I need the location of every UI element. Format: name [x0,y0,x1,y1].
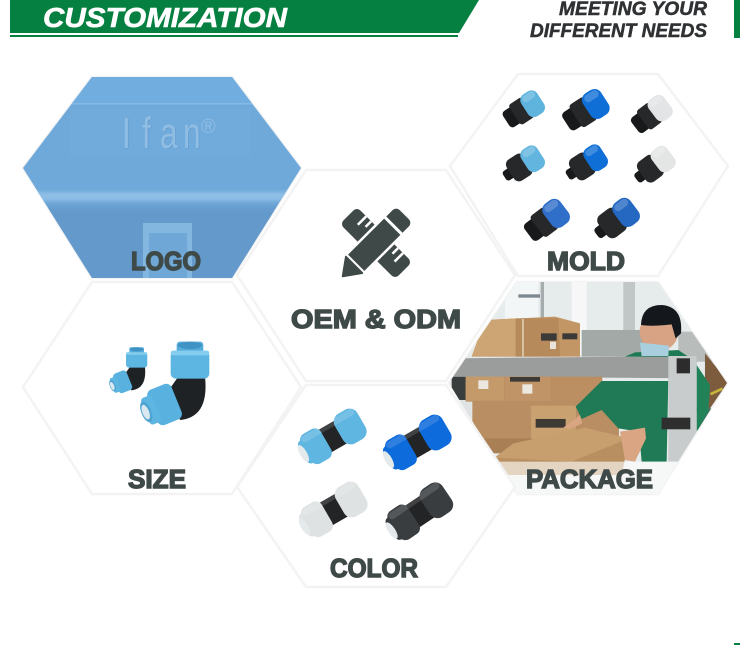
oem heading: OEM & ODM [291,304,461,334]
title: CUSTOMIZATION [43,2,288,33]
embossed brand mark: ® [201,116,216,138]
panel: mold [450,74,728,276]
icon: crossed pencil and ruler [333,205,414,286]
package label: PACKAGE [526,464,653,494]
mold label: MOLD [547,246,625,276]
carton in hands [496,428,625,470]
upright post [668,356,697,462]
subtitle [530,0,707,42]
size label: SIZE [128,464,186,494]
panel: size [23,282,301,494]
shelf beam [452,356,697,378]
worker [576,305,710,462]
coupling fittings [292,405,457,547]
elbow fittings [106,342,209,431]
label band [499,462,678,494]
panel: logo [22,76,302,279]
panel: color [237,385,515,587]
cartons on shelf [472,317,580,357]
embossed brand mark: Ifan [123,110,201,159]
cartons below shelf [466,377,602,402]
header accent bar [734,0,740,38]
panel: oem and odm [237,170,515,381]
panel: package [445,275,738,502]
header banner [10,0,479,37]
subtitle: DIFFERENT NEEDS [530,21,707,42]
mold fittings [497,86,679,246]
color label: COLOR [330,553,418,583]
corner accent [734,643,740,645]
warehouse photo [449,282,727,492]
embossed brand mark: Ifan [122,109,201,158]
logo label: LOGO [131,246,201,276]
